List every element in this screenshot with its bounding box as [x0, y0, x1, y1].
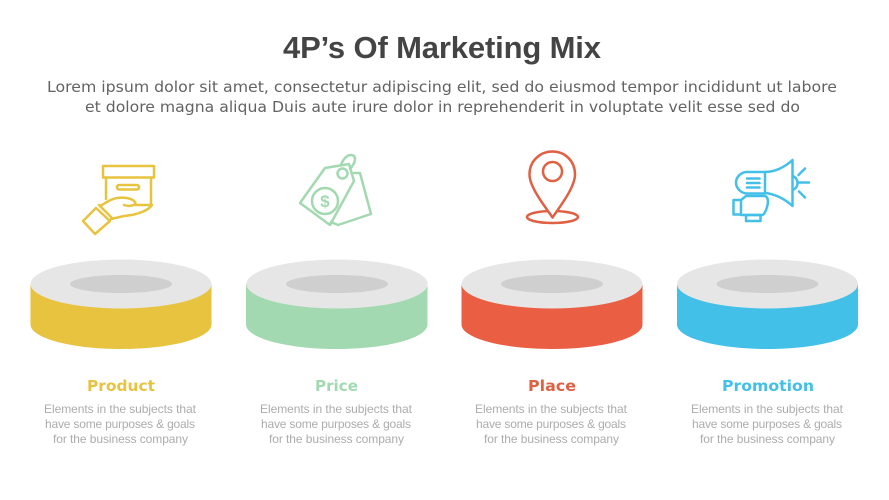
subtitle text: [47, 78, 837, 116]
text block: product: Product: [87, 377, 156, 395]
icon: price tags: $: [320, 192, 330, 211]
text block: promotion: have some purposes & goals: [692, 417, 842, 431]
subtitle text: Lorem ipsum dolor sit amet, consectetur adipiscing elit, sed do eiusmod tempor incididunt ut labore: [47, 78, 837, 96]
text block: place: for the business company: [484, 432, 619, 446]
disc: price: [246, 260, 428, 349]
text block: promotion: [691, 377, 844, 446]
text block: place: Elements in the subjects that: [475, 402, 628, 416]
text block: product: [44, 377, 197, 446]
text block: product: for the business company: [53, 432, 188, 446]
text block: price: [260, 377, 413, 446]
text block: promotion: Elements in the subjects that: [691, 402, 844, 416]
subtitle text: et dolore magna aliqua Duis aute irure dolor in reprehenderit in voluptate velit esse sed do: [85, 98, 800, 116]
text block: promotion: for the business company: [700, 432, 835, 446]
text block: price: Elements in the subjects that: [260, 402, 413, 416]
disc: product: [30, 260, 212, 349]
icon: price tags: [300, 155, 371, 225]
text block: price: Price: [315, 377, 358, 395]
title: 4P’s Of Marketing Mix: [283, 30, 602, 65]
text block: place: Place: [528, 377, 576, 395]
text block: price: for the business company: [269, 432, 404, 446]
disc: place: [462, 260, 642, 349]
text block: product: have some purposes & goals: [45, 417, 195, 431]
text block: place: [475, 377, 628, 446]
text block: promotion: Promotion: [722, 377, 814, 395]
icon: location pin: [527, 152, 578, 223]
text block: product: Elements in the subjects that: [44, 402, 197, 416]
icon: hand holding box: [83, 166, 154, 234]
icon: megaphone: [734, 160, 809, 221]
text block: place: have some purposes & goals: [476, 417, 626, 431]
text block: price: have some purposes & goals: [261, 417, 411, 431]
disc: promotion: [677, 260, 858, 349]
